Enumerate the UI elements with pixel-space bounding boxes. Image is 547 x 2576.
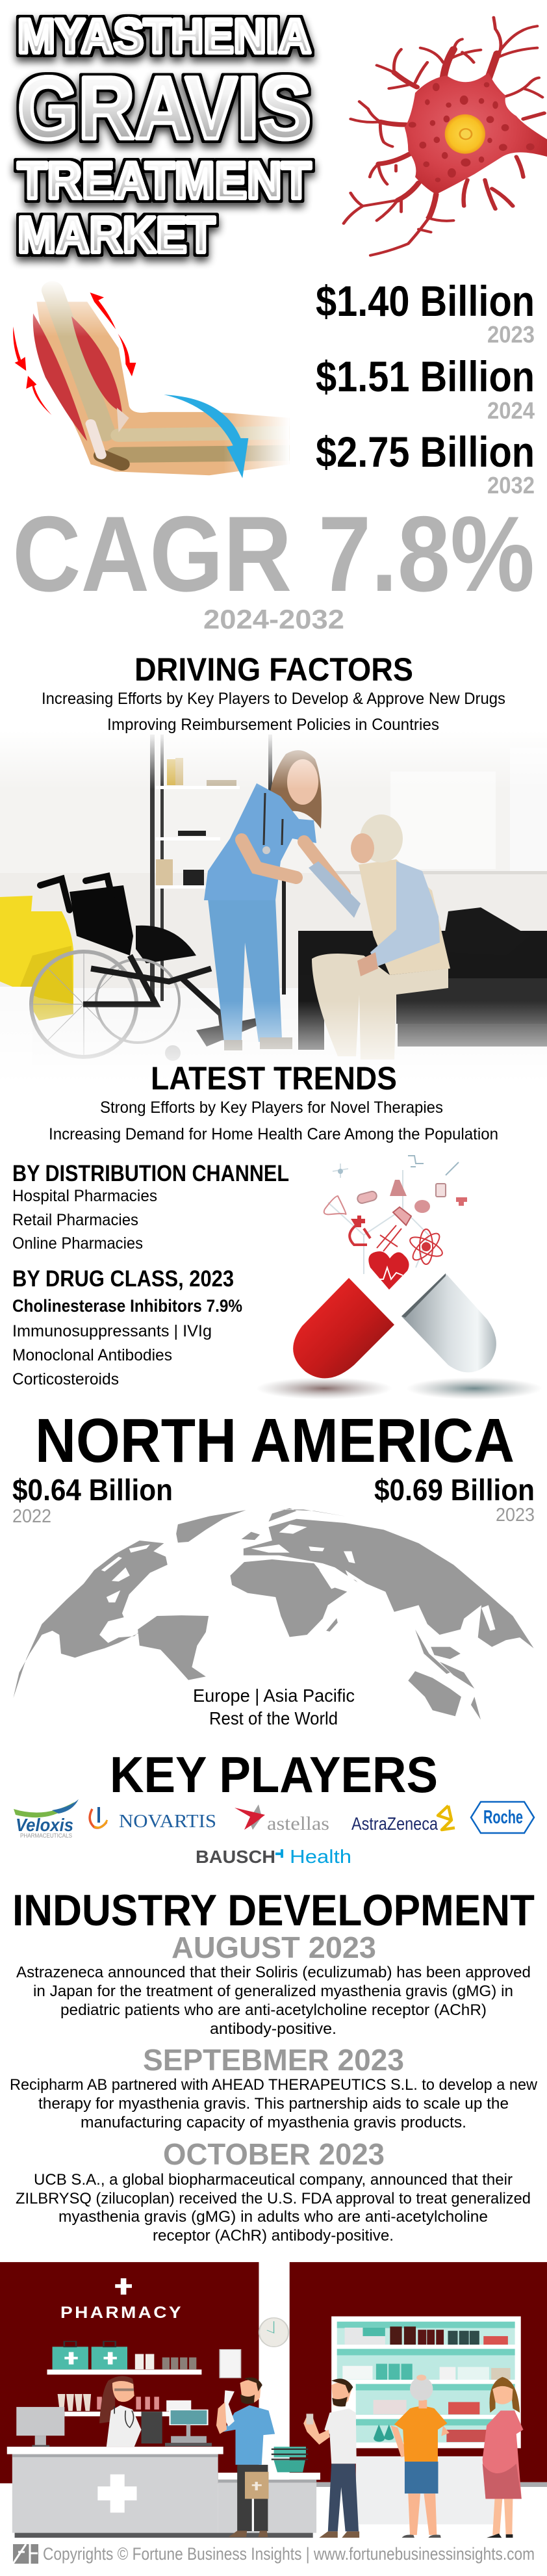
capsule shadows: [256, 1377, 392, 1399]
development: August 2023: [16, 1931, 531, 2038]
yellow chair: [0, 896, 73, 1004]
description: Recipharm AB partnered with AHEAD THERAPEUTICS S.L. to develop a new: [10, 2076, 537, 2094]
logo: Novartis: NOVARTIS: [119, 1811, 216, 1832]
description: [16, 1964, 531, 2038]
north america 2023 value: $0.69 Billion: [374, 1473, 535, 1507]
clock: [259, 2318, 288, 2347]
lower back shelf: [64, 2412, 171, 2416]
description: receptor (AChR) antibody-positive.: [153, 2227, 394, 2244]
year 2023: 2023: [496, 1505, 535, 1526]
first aid kits: [53, 2341, 127, 2369]
year 2024: 2024: [487, 397, 535, 424]
year 2023: 2023: [487, 321, 535, 348]
capsule: red half: [293, 1278, 394, 1378]
title: [18, 9, 311, 263]
photo: nurse helping patient: [0, 731, 547, 1095]
arm bones: [53, 290, 314, 464]
CAGR period: 2024-2032: [203, 604, 344, 634]
patient: [309, 814, 450, 1060]
latest trends text: [49, 1099, 498, 1143]
nurse: [204, 750, 344, 1050]
capsule: white half: [401, 1273, 496, 1372]
customer with bag: [216, 2378, 275, 2537]
other regions: Europe | Asia Pacific: [193, 1685, 355, 1706]
drug class heading: BY DRUG CLASS, 2023: [12, 1266, 234, 1292]
logo: AstraZeneca: AstraZeneca: [351, 1814, 438, 1834]
north america 2022 value: $0.64 Billion: [12, 1473, 173, 1507]
logo: Roche: [471, 1802, 534, 1833]
description: antibody-positive.: [210, 2020, 337, 2038]
illustration: open capsule with medical icons: [256, 1156, 542, 1399]
driving factors text: Improving Reimbursement Policies in Countries: [107, 716, 439, 734]
logo: Fortune Business Insights: [13, 2544, 38, 2564]
icon: heart: [368, 1251, 409, 1290]
key players heading: KEY PLAYERS: [110, 1746, 438, 1803]
counter: [7, 2447, 320, 2538]
logo: Veloxis: PHARMACEUTICALS: [20, 1832, 72, 1840]
poster: [220, 2350, 241, 2378]
computer monitor: [16, 2407, 64, 2447]
pharmacist: [99, 2376, 162, 2447]
logo: Novartis: [90, 1807, 216, 1832]
wheelchair: [31, 876, 262, 1061]
cash register: [165, 2410, 212, 2446]
drug class items: Immunosuppressants | IVIg: [12, 1322, 212, 1340]
description: [10, 2076, 537, 2131]
cabinet: [356, 2456, 496, 2525]
logo: Bausch Health: [196, 1847, 351, 1867]
shelf goods: [342, 2326, 511, 2442]
logo: Roche: Roche: [483, 1807, 523, 1828]
basket: [272, 2447, 308, 2472]
logo: Veloxis: [14, 1799, 79, 1840]
distribution items: Online Pharmacies: [12, 1234, 143, 1253]
highlighted drug class: Cholinesterase Inhibitors 7.9%: [12, 1296, 242, 1316]
development: September 2023: [10, 2043, 537, 2131]
description: [16, 2171, 531, 2244]
illustration: arm muscles: [13, 279, 324, 479]
year 2022: 2022: [12, 1506, 51, 1527]
date: AUGUST 2023: [172, 1931, 376, 1964]
other regions: [193, 1685, 355, 1728]
description: myasthenia gravis (gMG) in adults who are anti-acetylcholine: [58, 2208, 488, 2226]
latest trends heading: LATEST TRENDS: [151, 1060, 397, 1097]
drug class items: [12, 1322, 212, 1388]
upper back shelf: [47, 2369, 201, 2374]
customer with bottle: [303, 2378, 359, 2538]
wall left: [0, 2262, 259, 2483]
description: in Japan for the treatment of generalized myasthenia gravis (gMG) in: [33, 1983, 513, 2000]
latest trends text: Increasing Demand for Home Health Care Among the Population: [49, 1125, 498, 1143]
title: MARKET: [18, 206, 215, 263]
description: Astrazeneca announced that their Soliris (eculizumab) has been approved: [16, 1964, 531, 1981]
description: ZILBRYSQ (zilucoplan) received the U.S. FDA approval to treat generalized: [16, 2190, 531, 2207]
distribution items: Retail Pharmacies: [12, 1211, 138, 1229]
other regions: Rest of the World: [209, 1708, 338, 1728]
logo: Astellas: astellas: [267, 1813, 329, 1834]
blue arrow: [164, 395, 248, 478]
driving factors heading: DRIVING FACTORS: [134, 651, 413, 688]
description: pediatric patients who are anti-acetylcholine receptor (AChR): [60, 2001, 487, 2019]
latest trends text: Strong Efforts by Key Players for Novel Therapies: [100, 1099, 443, 1117]
title: GRAVIS: [18, 59, 311, 157]
date: SEPTEBMER 2023: [143, 2043, 404, 2077]
product shelf unit: [331, 2317, 521, 2448]
logo: Veloxis: Veloxis: [16, 1815, 73, 1835]
arm muscles: [33, 313, 87, 441]
footer: [13, 2544, 535, 2564]
date: OCTOBER 2023: [163, 2137, 385, 2171]
wall right: [290, 2262, 547, 2482]
pregnant customer: [483, 2377, 524, 2538]
logo: Astellas: [235, 1804, 329, 1834]
driving factors text: [42, 690, 505, 734]
red arrows: [13, 293, 136, 415]
driving factors text: Increasing Efforts by Key Players to Develop & Approve New Drugs: [42, 690, 505, 708]
medical icons: [324, 1156, 467, 1274]
development: October 2023: [16, 2137, 531, 2244]
customer in orange: [390, 2374, 450, 2538]
logo: Bausch Health: BAUSCH: [196, 1847, 275, 1867]
icon: neuron: [344, 18, 547, 255]
arm skin: [36, 302, 290, 475]
world map: [13, 1508, 534, 1720]
description: UCB S.A., a global biopharmaceutical company, announced that their: [34, 2171, 513, 2189]
bottles: [135, 2354, 196, 2369]
sign plus: [115, 2278, 132, 2295]
inland seas: [101, 1524, 496, 1631]
logo: Bausch Health: Health: [290, 1847, 351, 1867]
tubes and syringes: [58, 2394, 191, 2412]
market size values: [316, 277, 535, 499]
distribution items: Hospital Pharmacies: [12, 1187, 157, 1205]
title: TREATMENT: [18, 151, 311, 209]
drug class items: Monoclonal Antibodies: [12, 1346, 172, 1364]
shelf: [150, 735, 286, 1001]
distribution items: [12, 1187, 157, 1253]
pharmacy sign: PHARMACY: [60, 2304, 183, 2322]
title: MYASTHENIA: [18, 9, 311, 63]
sofa: [298, 907, 547, 1050]
year 2032: 2032: [487, 472, 535, 499]
by distribution channel: [12, 1161, 289, 1253]
distribution heading: BY DISTRIBUTION CHANNEL: [12, 1161, 289, 1186]
illustration: pharmacy scene: [0, 2262, 547, 2538]
by drug class: [12, 1266, 242, 1388]
description: therapy for myasthenia gravis. This partnership aids to scale up the: [38, 2095, 509, 2113]
drug class items: Corticosteroids: [12, 1370, 119, 1388]
description: manufacturing capacity of myasthenia gravis products.: [81, 2114, 466, 2131]
